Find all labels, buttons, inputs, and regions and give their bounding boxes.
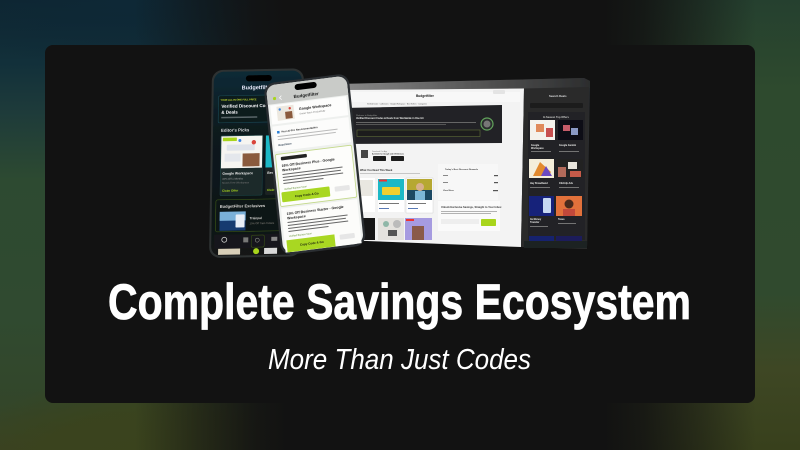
offer card 1: Verified Expires Soon — [284, 185, 308, 191]
bottom navigation — [214, 233, 296, 255]
editor's pick card: Google Workspace — [222, 171, 253, 176]
dark hero banner — [340, 105, 502, 144]
editor's pick card — [220, 135, 263, 196]
notch — [246, 75, 272, 81]
brand card: Google Workspace — [299, 103, 332, 111]
photo product card — [407, 179, 432, 200]
sidebar card: Money Transfer: Transfer — [530, 221, 540, 224]
phone header — [266, 76, 348, 105]
sidebar card: Google Workspace — [530, 120, 555, 152]
dark search sidebar: Search Deals — [549, 94, 567, 98]
sidebar card: Clickup: ClickUp Ads — [559, 182, 574, 185]
front phone — [263, 73, 366, 256]
page header with logo: Verified Deals · Collections · Google Workspace · Best Sellers · Categories — [367, 102, 427, 106]
offer card 1: Workspace — [282, 166, 301, 172]
verified codes hero: Verified Discount Codes — [221, 103, 274, 109]
exclusives panel — [215, 199, 290, 232]
app download row — [361, 150, 404, 161]
sidebar card: Google Workspace: Workspace — [531, 147, 544, 150]
second pick card: Bestsellers — [267, 171, 286, 175]
recommendation note — [272, 117, 351, 152]
app download row: Download Our App — [372, 150, 387, 153]
sidebar card: portrait: Taxes — [558, 218, 565, 221]
title: Complete Savings Ecosystem — [108, 274, 691, 330]
page header with logo: Budgetfilter — [416, 94, 435, 98]
phone header: Budgetfilter — [293, 91, 319, 99]
hero badge — [481, 118, 493, 130]
device mockups — [209, 68, 590, 258]
subtitle: More Than Just Codes — [268, 344, 531, 376]
sidebar card: Clickup — [557, 159, 583, 188]
brand card: Smart Team Productivity — [299, 109, 326, 116]
brand card — [270, 96, 348, 125]
copy code button: Copy Code & Go — [300, 240, 324, 247]
page header with logo — [350, 92, 520, 106]
sidebar card: portrait — [556, 196, 582, 224]
exclusives panel: 15% Off Train Tickets — [250, 221, 275, 225]
newsletter box — [438, 201, 502, 231]
hero search field — [357, 130, 480, 136]
editor's picks heading: Editor's Picks — [221, 127, 250, 133]
what you need section — [350, 168, 433, 213]
exclusives panel: BudgetFilter Exclusives — [220, 203, 266, 209]
sidebar card: Google Gemini — [558, 120, 583, 152]
savings sidebar panel: Today's Best Discount Rewards — [445, 168, 479, 171]
verified codes hero — [218, 95, 285, 123]
exclusives panel: Trainpal — [250, 216, 262, 220]
dark search sidebar — [521, 87, 589, 249]
sidebar card: Google Workspace: Google — [531, 144, 540, 147]
second pick card — [265, 134, 296, 195]
what you need section: What You Need This Week — [360, 168, 393, 172]
newsletter box: Unlock Exclusive Savings, Straight to Your Inbox — [441, 205, 502, 209]
recommendation note: Your AI-Pro Recommendation — [281, 125, 318, 134]
offer card 1 — [275, 145, 357, 207]
second pick card: Claim — [267, 188, 276, 192]
offer card 2: 15% Off Business Starter - Google — [286, 205, 344, 216]
dark hero banner: Verified Discount Codes & Deals from Worldwide in One Hit — [356, 117, 424, 120]
copy code button: Copy Code & Go — [295, 191, 319, 198]
main white page — [340, 88, 524, 247]
editor's pick card: 15% Off 1 Months — [222, 176, 244, 181]
desktop browser window — [340, 78, 590, 249]
second row of product cards — [350, 218, 432, 240]
verified codes hero: YOUR ALL-IN-ONE FULL PRICE — [220, 98, 257, 102]
dark search sidebar: In Season Top Offers — [543, 115, 569, 119]
sidebar card: Money Transfer: Xe Money — [530, 218, 542, 221]
sidebar card: Money Transfer — [529, 196, 554, 227]
teal product card — [378, 179, 404, 200]
verified codes hero: & Deals — [221, 110, 238, 115]
dark hero banner: Welcome to Budgetfilter — [356, 114, 378, 117]
offer card 1: 16% Off Business Plus - Google — [281, 157, 335, 168]
editor's pick card: Month Free Workspace — [222, 180, 250, 185]
offer card 2: Workspace — [287, 214, 306, 220]
main dark panel — [45, 45, 755, 403]
back phone logo: Budgetfilter — [242, 85, 273, 91]
offer card 2 — [281, 199, 362, 253]
browser top bar — [340, 78, 590, 90]
search icon row — [493, 90, 505, 94]
offer card 2: Verified Expires Soon — [289, 232, 313, 238]
sidebar card: Google Gemini: Google Gemini — [559, 144, 576, 147]
editor's pick card: Claim Offer — [222, 188, 239, 193]
app download row: Available for Google and iOS Devices — [372, 152, 404, 156]
sidebar card: Hey Broadband: Hey Broadband — [530, 182, 548, 185]
savings sidebar panel — [438, 164, 498, 200]
back phone — [209, 68, 304, 258]
savings sidebar panel: View More — [443, 190, 455, 192]
recommendation note: Read More — [278, 141, 292, 147]
sidebar card: Hey Broadband — [529, 159, 554, 188]
